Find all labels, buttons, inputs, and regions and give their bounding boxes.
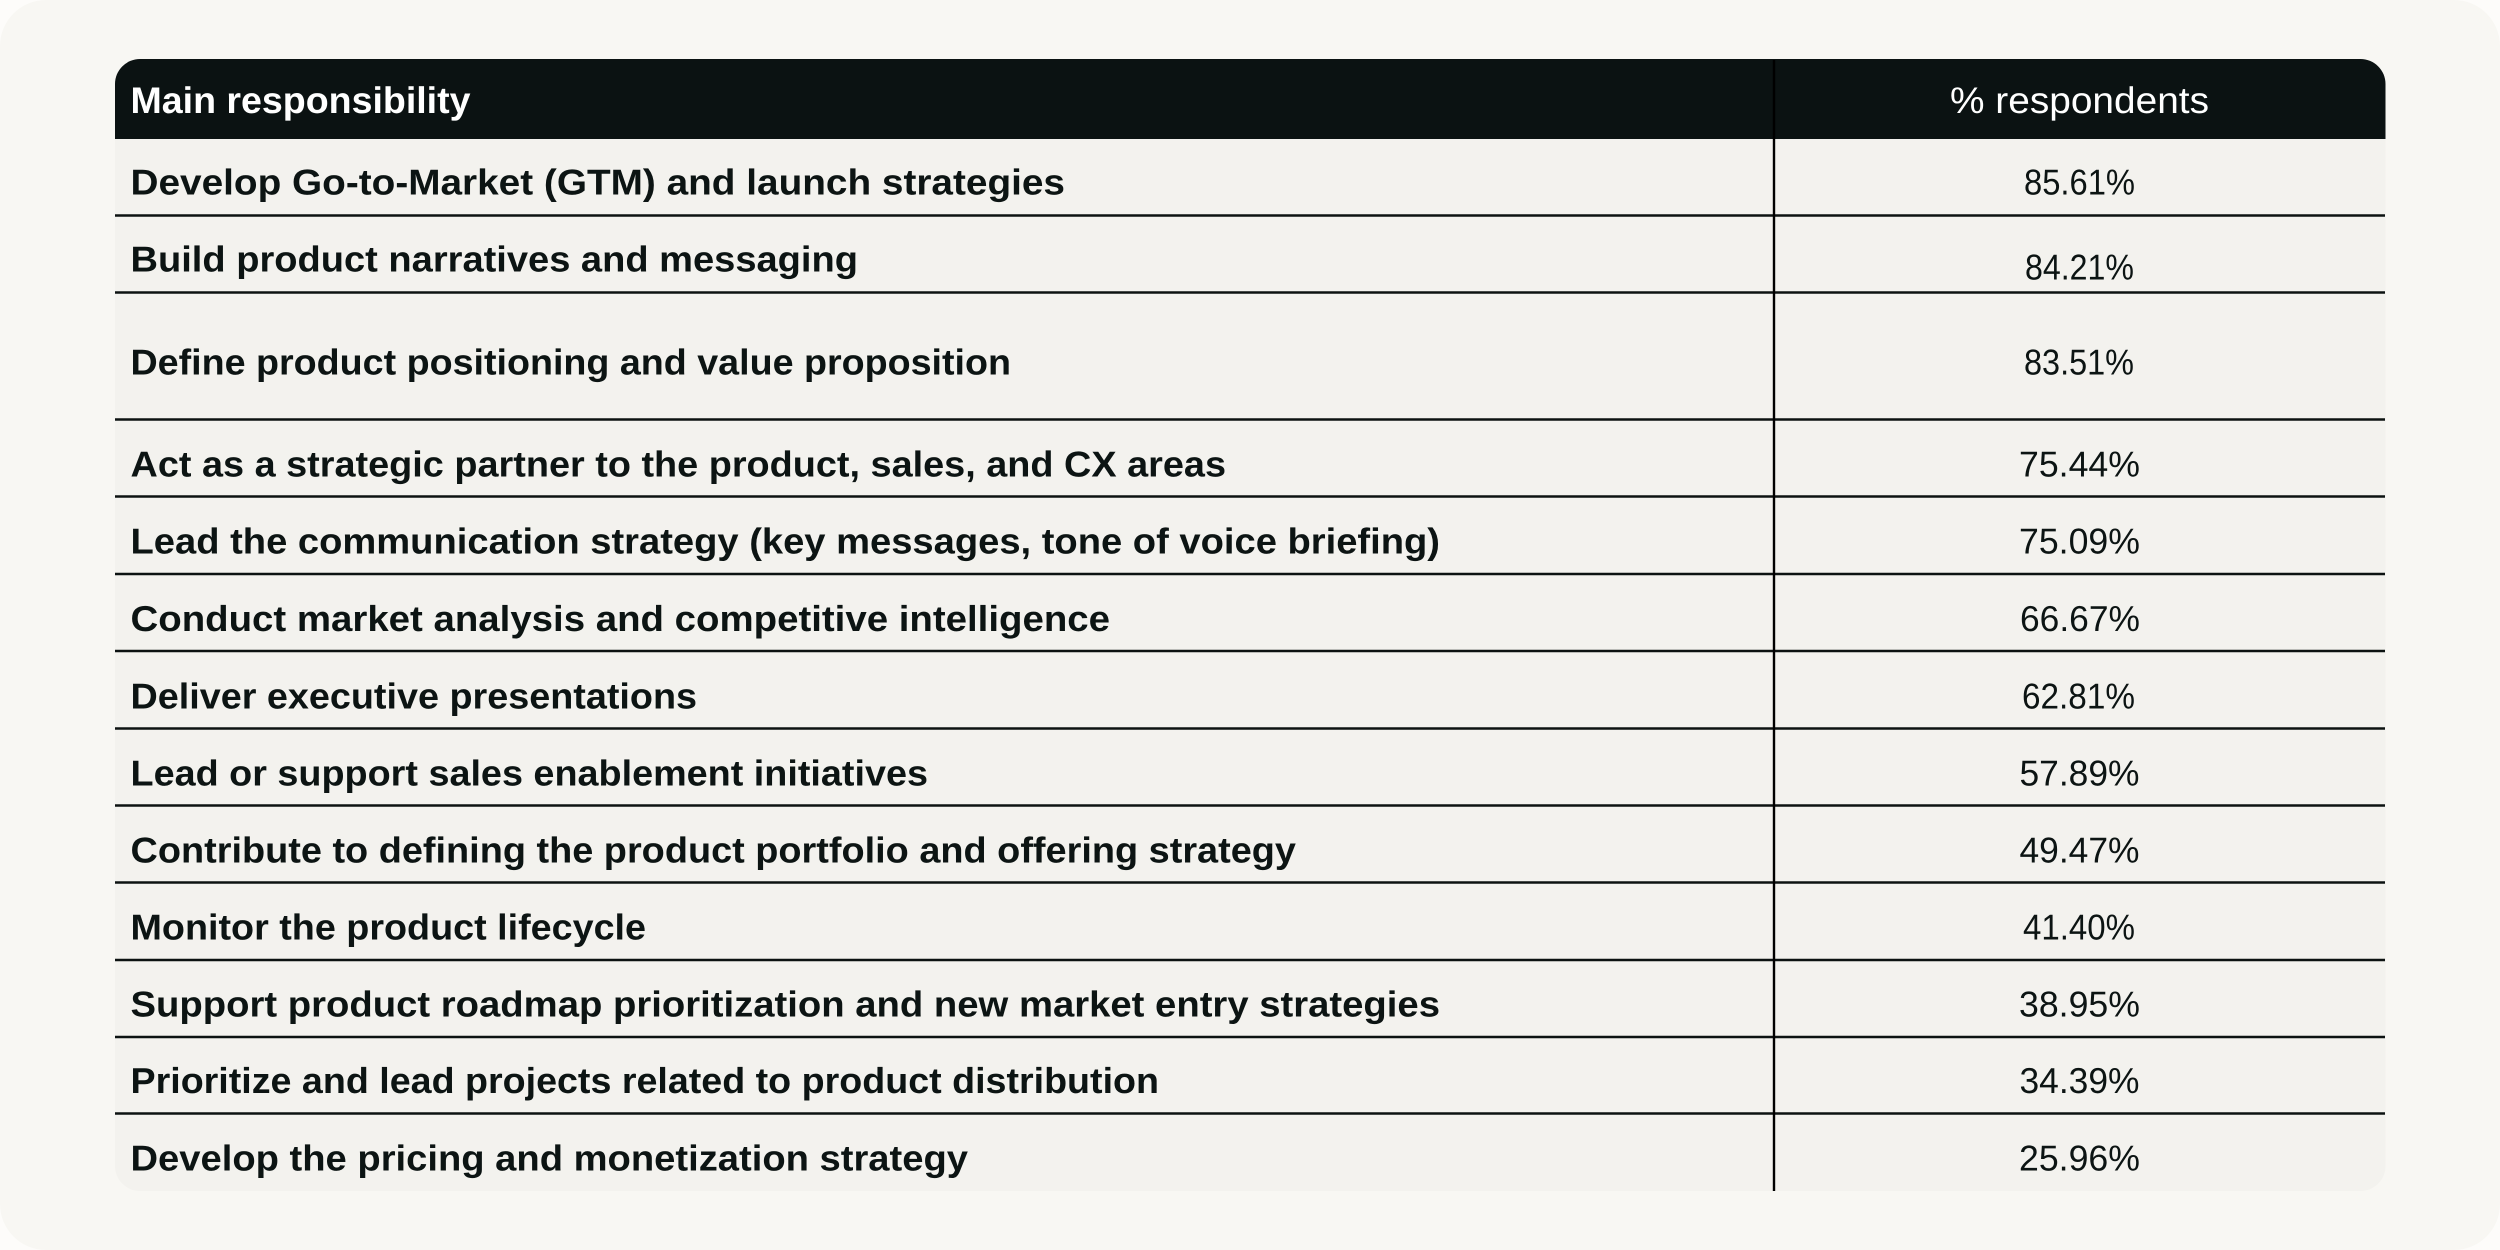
table header [115,59,2386,139]
row 12: Prioritize and lead projects related to product distribution [130,1060,1159,1101]
row 2: 84.21% [2025,246,2134,288]
row 3: Define product positioning and value proposition [130,342,1011,382]
row 8: 57.89% [2020,752,2140,794]
row 13: Develop the pricing and monetization strategy [130,1138,968,1178]
row 4: Act as a strategic partner to the product, sales, and CX areas [130,444,1226,484]
header: percent respondents: % respondents [1950,80,2209,121]
row 6: 66.67% [2020,598,2140,639]
header: main responsibility: Main responsibility [130,80,471,121]
row 10: Monitor the product lifecycle [130,906,646,948]
row 4: 75.44% [2019,444,2140,484]
row 10: 41.40% [2023,906,2135,948]
row 1: Develop Go-to-Market (GTM) and launch strategies [130,162,1065,202]
row 12 [130,1060,2140,1101]
row 4 [130,444,2140,484]
row 9: 49.47% [2020,830,2140,870]
row 13: 25.96% [2019,1138,2140,1178]
row 3 [130,342,2134,382]
row 7 [130,676,2135,716]
row 10 [130,906,2135,948]
row 5: Lead the communication strategy (key messages, tone of voice briefing) [130,520,1440,562]
table body panel [115,130,2386,1191]
row 3: 83.51% [2024,342,2134,382]
row 6 [130,598,2140,639]
row 8 [130,752,2140,794]
row 5 [130,520,2140,562]
row 12: 34.39% [2020,1060,2140,1101]
row 9 [130,830,2140,870]
row 2 [130,238,2134,288]
row 13 [130,1138,2140,1178]
row 11: Support product roadmap prioritization and new market entry strategies [130,984,1440,1024]
row 7: 62.81% [2022,676,2135,716]
header background [115,59,2386,139]
row 6: Conduct market analysis and competitive intelligence [130,598,1110,639]
row 11 [130,984,2140,1024]
row 2: Build product narratives and messaging [130,238,858,280]
row 7: Deliver executive presentations [130,676,697,716]
row 8: Lead or support sales enablement initiatives [130,752,928,794]
row 11: 38.95% [2019,984,2140,1024]
row 5: 75.09% [2019,520,2140,562]
row 1: 85.61% [2024,162,2135,202]
row 9: Contribute to defining the product portfolio and offering strategy [130,830,1296,870]
row 1 [130,162,2135,202]
